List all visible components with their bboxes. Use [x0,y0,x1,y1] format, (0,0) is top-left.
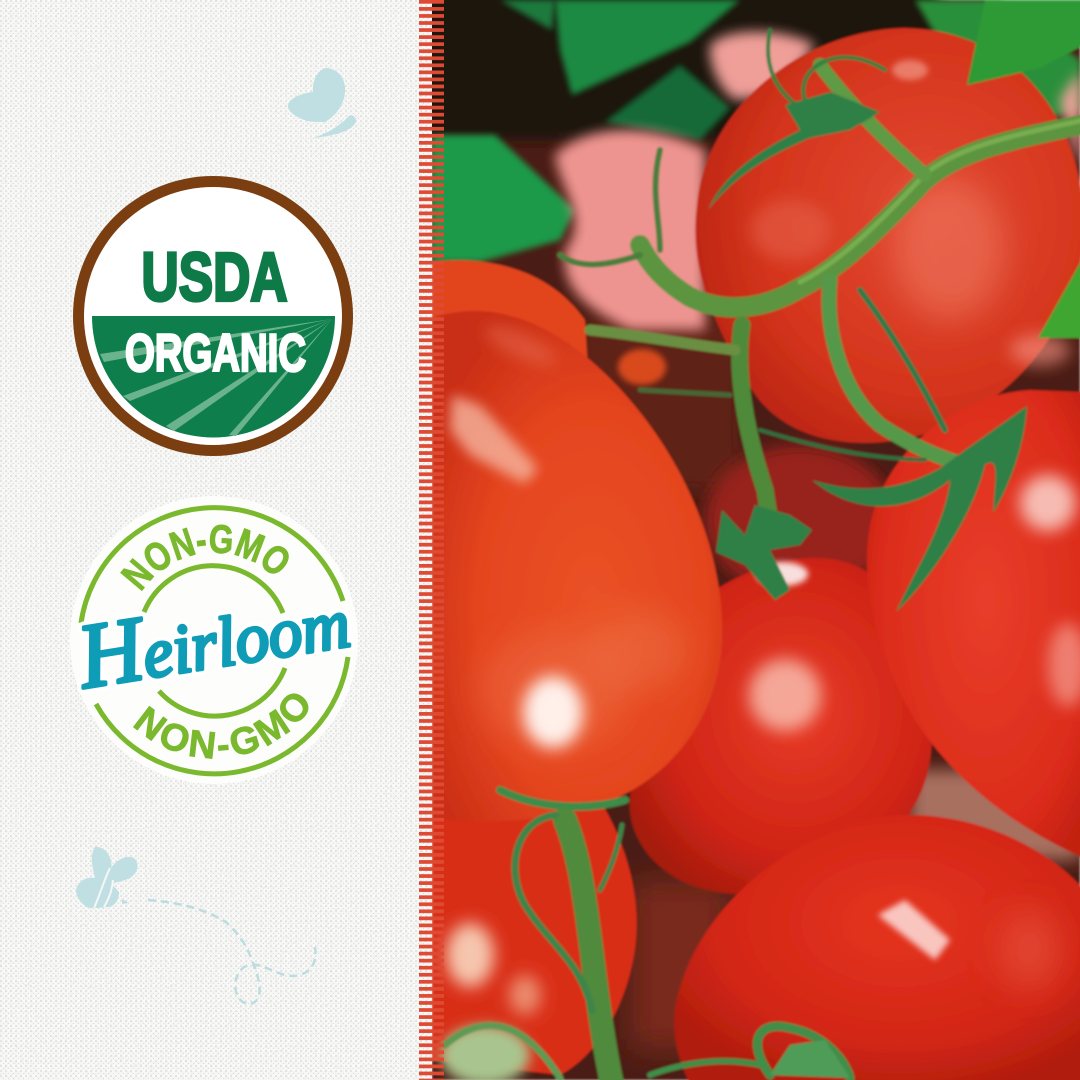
tomato vine stems [445,30,1080,1080]
tomato: right [867,390,1080,858]
striped red border [419,0,444,1080]
NON-GMO top text: NON-GMO [120,524,289,592]
tomato: bottom left [432,800,637,1080]
badge: Heirloom Non-GMO seal [70,496,358,784]
Heirloom script: Heirloom [70,564,356,708]
tomato: back left [432,260,590,400]
tomato: large plum [432,311,722,822]
panel: linen background [0,0,432,1080]
icon: bee with dashed flight trail [76,847,316,1004]
badge: USDA Organic seal [73,176,353,456]
Heirloom script: Heirloom [70,564,356,708]
leaves in the foreground [967,0,1080,338]
NON-GMO bottom text: NON-GMO [133,693,308,759]
icon: butterfly top [288,68,356,138]
panel: tomato photograph [420,0,1080,1080]
sepal clusters [708,92,1027,1078]
tomato: bottom right [674,815,1080,1080]
outer and inner ring arcs [81,508,348,774]
ORGANIC wordmark: ORGANIC [125,324,306,383]
tomato: top right [695,28,1080,443]
tomato: centre bottom [630,558,932,895]
pink tomatoes in background [555,32,1080,330]
green field with sun rays [92,316,335,438]
USDA wordmark: USDA [142,238,288,316]
